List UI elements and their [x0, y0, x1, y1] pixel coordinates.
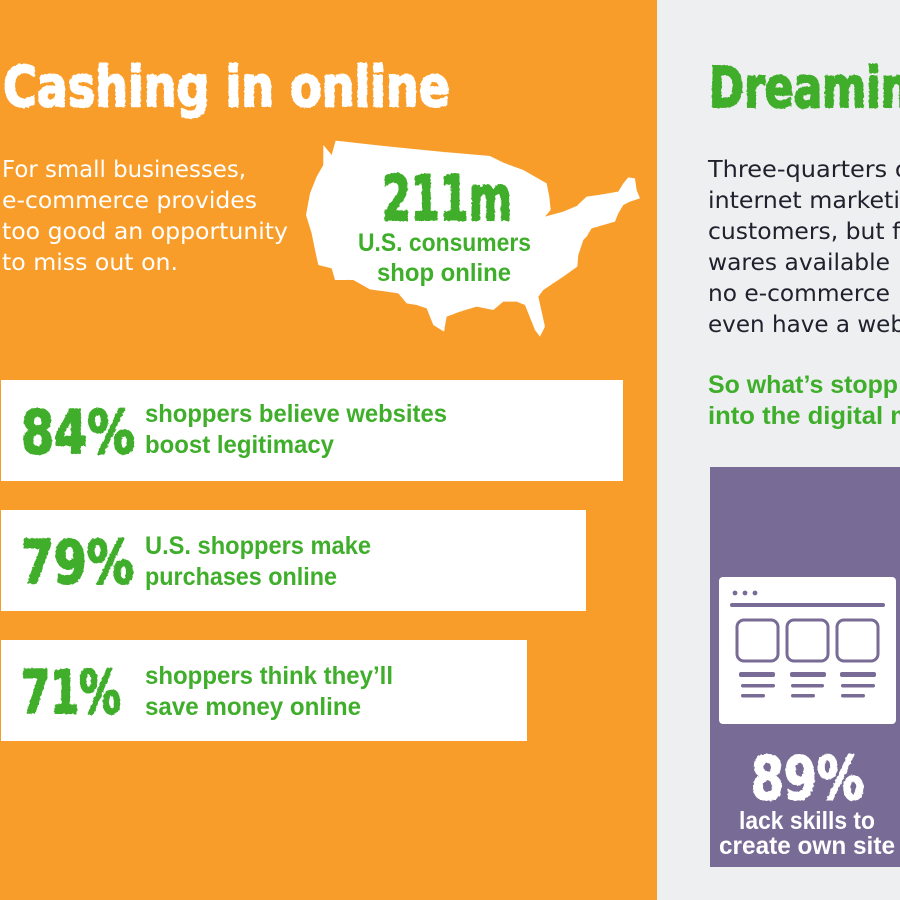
- map: USA with 211m statistic: [306, 141, 640, 337]
- label: shoppers think they'll save money online: [145, 662, 393, 721]
- icon: website wireframe: [719, 577, 896, 724]
- text block: question: [708, 371, 900, 430]
- text block: intro: [2, 157, 288, 276]
- text block: intro right: no e-commerce: [708, 281, 890, 307]
- text block: intro right: even have a web: [708, 312, 900, 338]
- statistic: 71%: 71%: [21, 658, 121, 728]
- label: U.S. shoppers make purchases online: U.S. shoppers make: [145, 532, 371, 560]
- statistic: 84%: 84%: [21, 398, 135, 468]
- text block: intro right: wares available: [708, 250, 890, 276]
- label: shoppers believe websites boost legitimacy: [145, 400, 447, 459]
- label: U.S. consumers shop online: U.S. consumers: [358, 229, 531, 257]
- bar: 84%: [1, 380, 623, 481]
- panel: grey background: [657, 0, 900, 900]
- text block: intro: e-commerce provides: [2, 188, 257, 214]
- label: U.S. shoppers make purchases online: purchases online: [145, 563, 337, 591]
- bar: 79%: [1, 510, 586, 611]
- label: shoppers believe websites boost legitimacy: shoppers believe websites: [145, 400, 447, 428]
- label: U.S. consumers shop online: shop online: [377, 259, 511, 287]
- text block: question: So what’s stopp: [708, 371, 898, 399]
- statistic: 79%: 79%: [21, 528, 134, 598]
- label: shoppers believe websites boost legitimacy: boost legitimacy: [145, 431, 334, 459]
- label: lack skills to create own site: [719, 807, 895, 860]
- icon: USA silhouette: [306, 141, 640, 337]
- statistic: 89%: 89%: [751, 744, 864, 814]
- statistic: 211m: 211m: [382, 162, 512, 235]
- text block: intro: too good an opportunity: [2, 219, 288, 245]
- text block: intro right: [707, 157, 900, 338]
- label: U.S. shoppers make purchases online: [145, 532, 371, 591]
- text block: intro: For small businesses,: [2, 157, 246, 183]
- label: lack skills to create own site: lack skills to: [739, 807, 875, 835]
- label: U.S. consumers shop online: [358, 229, 531, 287]
- heading: Cashing in online: Cashing in online: [3, 55, 450, 120]
- panel: 89% lack skills: [710, 467, 900, 867]
- bar: 71%: [1, 640, 527, 741]
- text block: intro: to miss out on.: [2, 250, 178, 276]
- label: shoppers think they'll save money online: save money online: [145, 693, 361, 721]
- panel: orange background: [0, 0, 657, 900]
- label: shoppers think they'll save money online: shoppers think they’ll: [145, 662, 393, 690]
- label: lack skills to create own site: create own site: [719, 832, 895, 860]
